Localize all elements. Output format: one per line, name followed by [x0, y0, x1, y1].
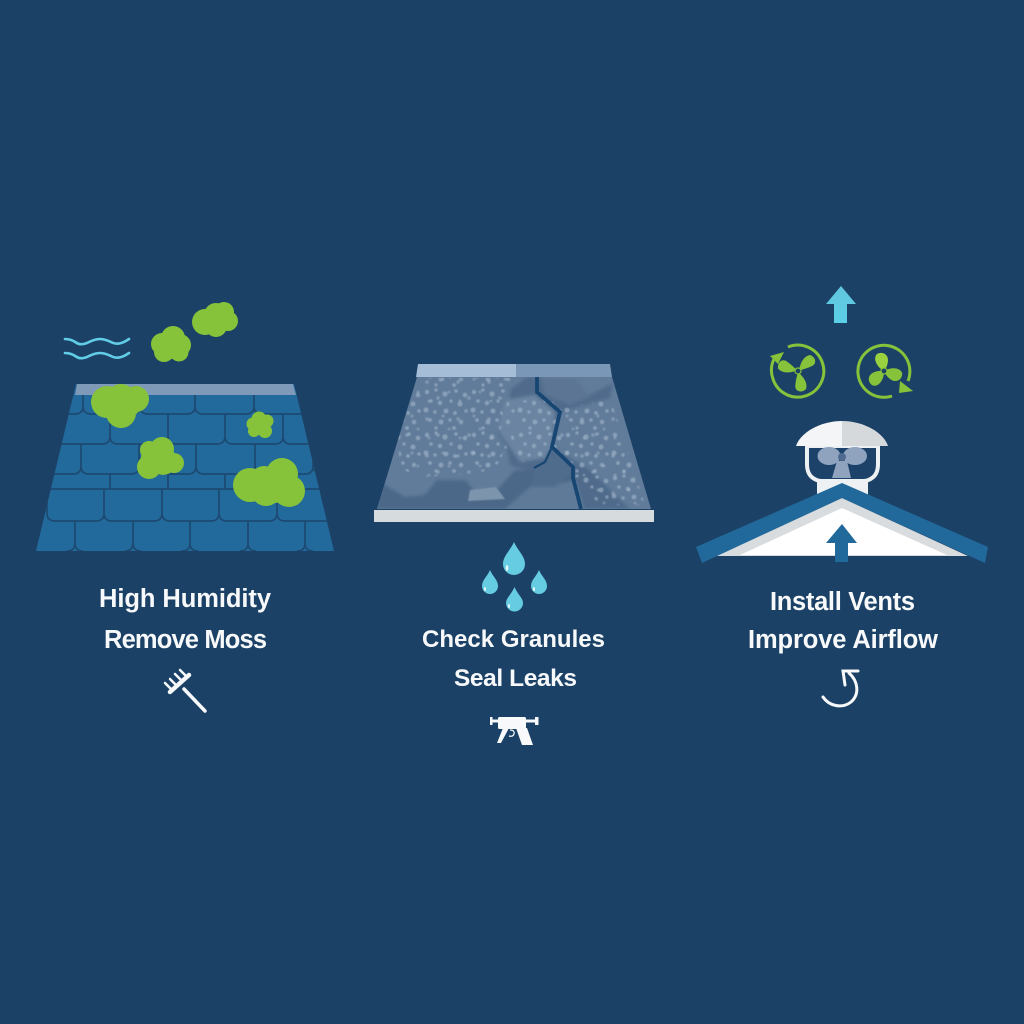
- icon: humidity waves: [65, 339, 129, 358]
- damaged shingle panel: [370, 364, 655, 522]
- label: check granules, seal leaks: Check Granules: [422, 626, 605, 653]
- icon: curved arrow: [823, 671, 858, 706]
- panel base strip: [374, 510, 654, 522]
- granules: [398, 378, 644, 506]
- arrow: air entering attic: [826, 524, 857, 562]
- icon: left fan: [770, 345, 824, 397]
- label: install vents, improve airflow: [748, 588, 938, 654]
- icon: water drops: [482, 542, 547, 612]
- moss patches on roof: [91, 384, 305, 507]
- worn patches: [377, 377, 630, 509]
- icon: right fan: [858, 345, 913, 397]
- label: install vents, improve airflow: Improve Airflow: [748, 626, 938, 654]
- label: high humidity, remove moss: Remove Moss: [104, 626, 267, 654]
- panel: granule loss and leaks: [370, 364, 655, 745]
- panel top strip: [416, 364, 516, 377]
- label: install vents, improve airflow: Install Vents: [770, 588, 915, 616]
- panel: vents and airflow: [696, 286, 988, 706]
- label: high humidity, remove moss: High Humidity: [99, 585, 272, 613]
- panel: high humidity and moss: [20, 302, 340, 711]
- icon: rake: [165, 670, 205, 711]
- icon: floating moss clumps: [151, 302, 238, 362]
- label: check granules, seal leaks: [422, 626, 605, 692]
- icon: caulk gun: [490, 717, 538, 745]
- label: check granules, seal leaks: Seal Leaks: [454, 665, 577, 692]
- label: high humidity, remove moss: [99, 585, 272, 654]
- crack: [534, 377, 581, 509]
- roof vent: [796, 421, 888, 498]
- shingled roof with moss: [20, 384, 340, 551]
- arrow: air rising: [826, 286, 856, 323]
- house roof: [696, 483, 988, 563]
